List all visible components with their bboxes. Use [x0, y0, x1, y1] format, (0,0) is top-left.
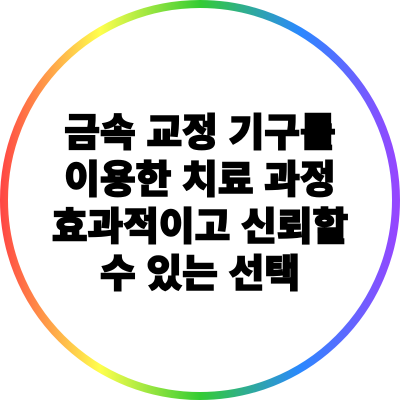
title: [52, 112, 348, 296]
title: 효과적이고 신뢰할: [52, 206, 348, 249]
title: 수 있는 선택: [100, 253, 300, 296]
title: 이용한 치료 과정: [64, 159, 336, 202]
title: 금속 교정 기구를: [64, 112, 336, 155]
